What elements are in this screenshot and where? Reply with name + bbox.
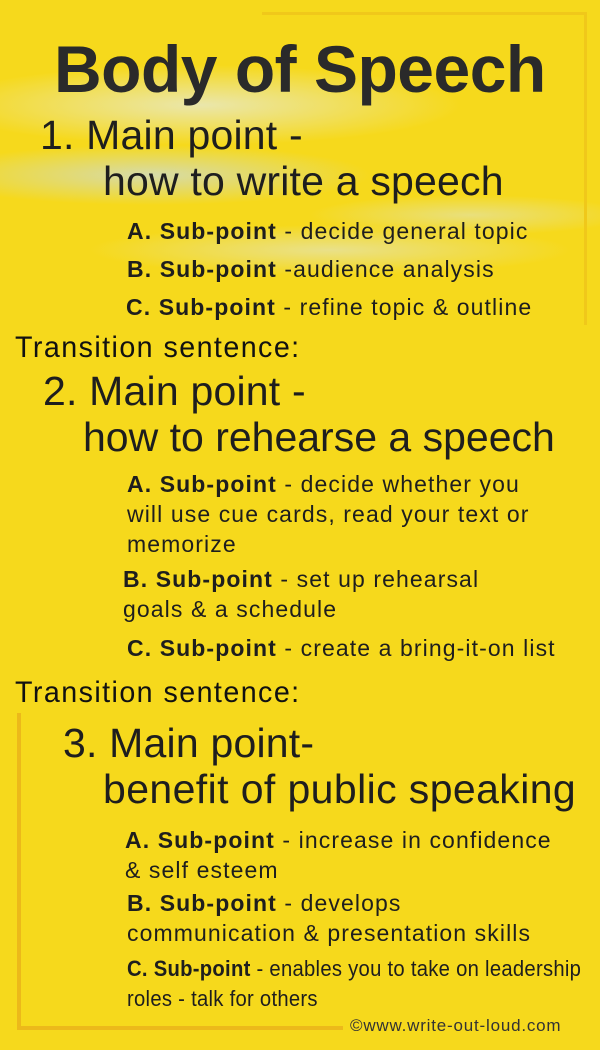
subpoints 1 <box>126 218 532 320</box>
subpoints 3: C. Sub-point - enables you to take on leadership <box>127 956 581 981</box>
subpoints 3: communication & presentation skills <box>127 920 531 946</box>
main point 2 <box>43 368 555 460</box>
frame top-right <box>262 12 587 325</box>
subpoints 2 <box>123 471 556 661</box>
main point 1: 1. Main point - <box>40 112 303 158</box>
subpoints 1: C. Sub-point - refine topic & outline <box>126 294 532 320</box>
copyright: ©www.write-out-loud.com <box>350 1016 561 1035</box>
transition sentence 1: Transition sentence: <box>15 331 301 364</box>
title: Body of Speech <box>54 32 546 106</box>
transition sentence 2: Transition sentence: <box>15 676 301 709</box>
subpoints 1: A. Sub-point - decide general topic <box>127 218 528 244</box>
subpoints 3 <box>125 827 581 1011</box>
subpoints 3: A. Sub-point - increase in confidence <box>125 827 552 853</box>
subpoints 2: C. Sub-point - create a bring-it-on list <box>127 635 556 661</box>
main point 3 <box>63 720 576 812</box>
subpoints 2: B. Sub-point - set up rehearsal <box>123 566 479 592</box>
subpoints 3: & self esteem <box>125 857 279 883</box>
subpoints 1: B. Sub-point -audience analysis <box>127 256 495 282</box>
frame bottom-left <box>17 713 343 1030</box>
background streaks <box>0 0 600 330</box>
subpoints 2: A. Sub-point - decide whether you <box>127 471 520 497</box>
main point 1: how to write a speech <box>103 158 504 204</box>
subpoints 3: roles - talk for others <box>127 986 318 1011</box>
subpoints 2: goals & a schedule <box>123 596 337 622</box>
main point 3: 3. Main point- <box>63 720 314 766</box>
main point 1 <box>40 112 504 204</box>
main point 3: benefit of public speaking <box>103 766 576 812</box>
subpoints 2: will use cue cards, read your text or <box>127 501 529 527</box>
main point 2: 2. Main point - <box>43 368 306 414</box>
subpoints 2: memorize <box>127 531 237 557</box>
subpoints 3: B. Sub-point - develops <box>127 890 402 916</box>
main point 2: how to rehearse a speech <box>83 414 555 460</box>
